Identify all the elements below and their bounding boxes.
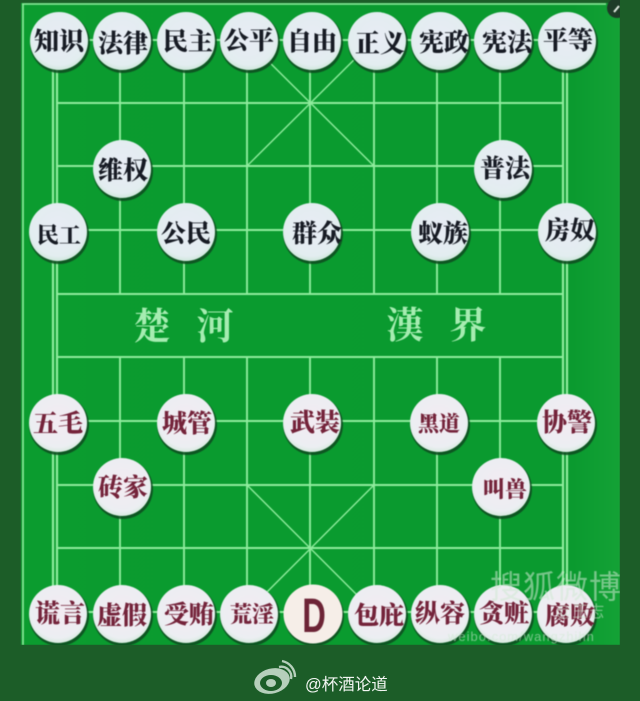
river text: 楚河: 河 [196,307,234,348]
red pieces: 黑道 [418,412,460,436]
black pieces: 平等 [543,26,593,55]
red pieces: 协警 [542,409,592,437]
black pieces: 房奴 [545,216,595,245]
black pieces: 民主 [163,28,213,56]
red pieces: 纵容 [415,599,465,628]
red pieces: 贪赃 [479,599,530,628]
black pieces: 法律 [98,29,148,58]
black pieces [29,12,598,264]
black pieces: 知识 [34,28,87,56]
red pieces: 五毛 [33,410,83,438]
caption: @杯酒论道 [305,675,388,694]
red pieces: 腐败 [545,601,595,630]
black pieces: 公民 [161,220,211,248]
watermark: @王志 [556,603,604,621]
black pieces: 群众 [292,220,342,248]
watermark: 搜狐微博 [490,569,622,605]
black pieces: 自由 [287,28,337,56]
red pieces: 谎言 [35,599,85,628]
king piece D [284,584,344,646]
icon: weibo logo [252,661,295,697]
king piece D: D [302,589,326,643]
black pieces: 普法 [480,154,533,183]
red pieces: 叫兽 [483,477,527,502]
red pieces: 武装 [290,408,340,437]
red pieces: 虚假 [97,601,147,630]
red pieces: 受贿 [164,601,214,629]
black pieces: 公平 [224,26,274,55]
river text: 漢界: 界 [450,305,486,347]
river text: 漢界: 漢 [386,305,424,347]
red pieces [29,394,597,646]
red pieces: 包庇 [354,602,404,630]
red pieces: 砖家 [98,473,148,502]
black pieces: 宪法 [482,28,535,57]
watermark: weibo.com/wangzhihn [447,629,595,644]
river text: 楚河: 楚 [134,306,172,348]
red pieces: 城管 [162,410,212,438]
black pieces: 宪政 [419,28,469,57]
river text: 漢界 [386,305,486,347]
black pieces: 维权 [98,157,148,185]
watermark [447,569,622,644]
black pieces: 蚁族 [418,220,468,248]
black pieces: 民工 [37,223,81,248]
river text: 楚河 [134,306,234,348]
black pieces: 正义 [355,30,405,58]
red pieces: 荒淫 [230,602,274,627]
